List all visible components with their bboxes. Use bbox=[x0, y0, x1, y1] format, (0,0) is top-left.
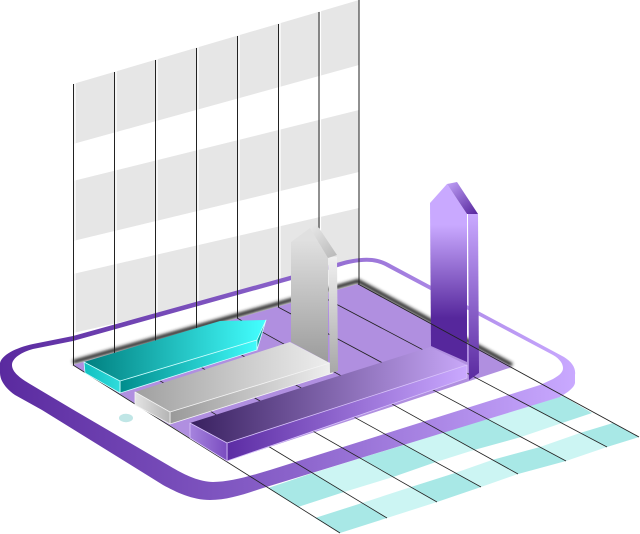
wall band gaps bbox=[75, 0, 320, 340]
home button bbox=[119, 414, 133, 422]
front face bbox=[430, 184, 467, 362]
top face bbox=[84, 320, 266, 381]
gray upward arrow bbox=[291, 225, 338, 373]
upper stripe bbox=[268, 396, 592, 507]
front face bbox=[120, 340, 257, 393]
gray bar bbox=[135, 342, 333, 424]
wall bottom shadow bbox=[73, 281, 512, 365]
floor lines bbox=[73, 295, 607, 533]
slanted tip bbox=[447, 182, 478, 214]
wall grid bbox=[73, 0, 359, 340]
tablet frame bbox=[0, 258, 575, 500]
front floor line bbox=[358, 284, 639, 437]
purple floor bbox=[73, 284, 512, 461]
front face bbox=[227, 365, 467, 461]
wall band 3 bbox=[73, 208, 359, 333]
slanted tip bbox=[310, 225, 337, 258]
end face bbox=[84, 362, 120, 393]
frame edge bbox=[0, 258, 575, 500]
front face bbox=[170, 363, 333, 424]
tip face bbox=[257, 320, 266, 350]
teal arrow bar bbox=[84, 320, 266, 393]
wall band 2 bbox=[73, 110, 359, 241]
side face bbox=[328, 257, 338, 373]
end face bbox=[190, 423, 227, 461]
teal floor stripes bbox=[268, 396, 639, 533]
purple bar bbox=[190, 347, 467, 461]
top face bbox=[135, 342, 330, 412]
end face bbox=[135, 392, 170, 424]
wall band 1 bbox=[73, 0, 359, 144]
tablet screen bbox=[12, 262, 563, 482]
vertical wall lines bbox=[74, 0, 359, 365]
front face bbox=[291, 228, 328, 362]
side face bbox=[468, 214, 479, 380]
lower stripe bbox=[315, 423, 639, 533]
purple upward arrow bbox=[430, 182, 479, 380]
top face bbox=[190, 347, 467, 443]
